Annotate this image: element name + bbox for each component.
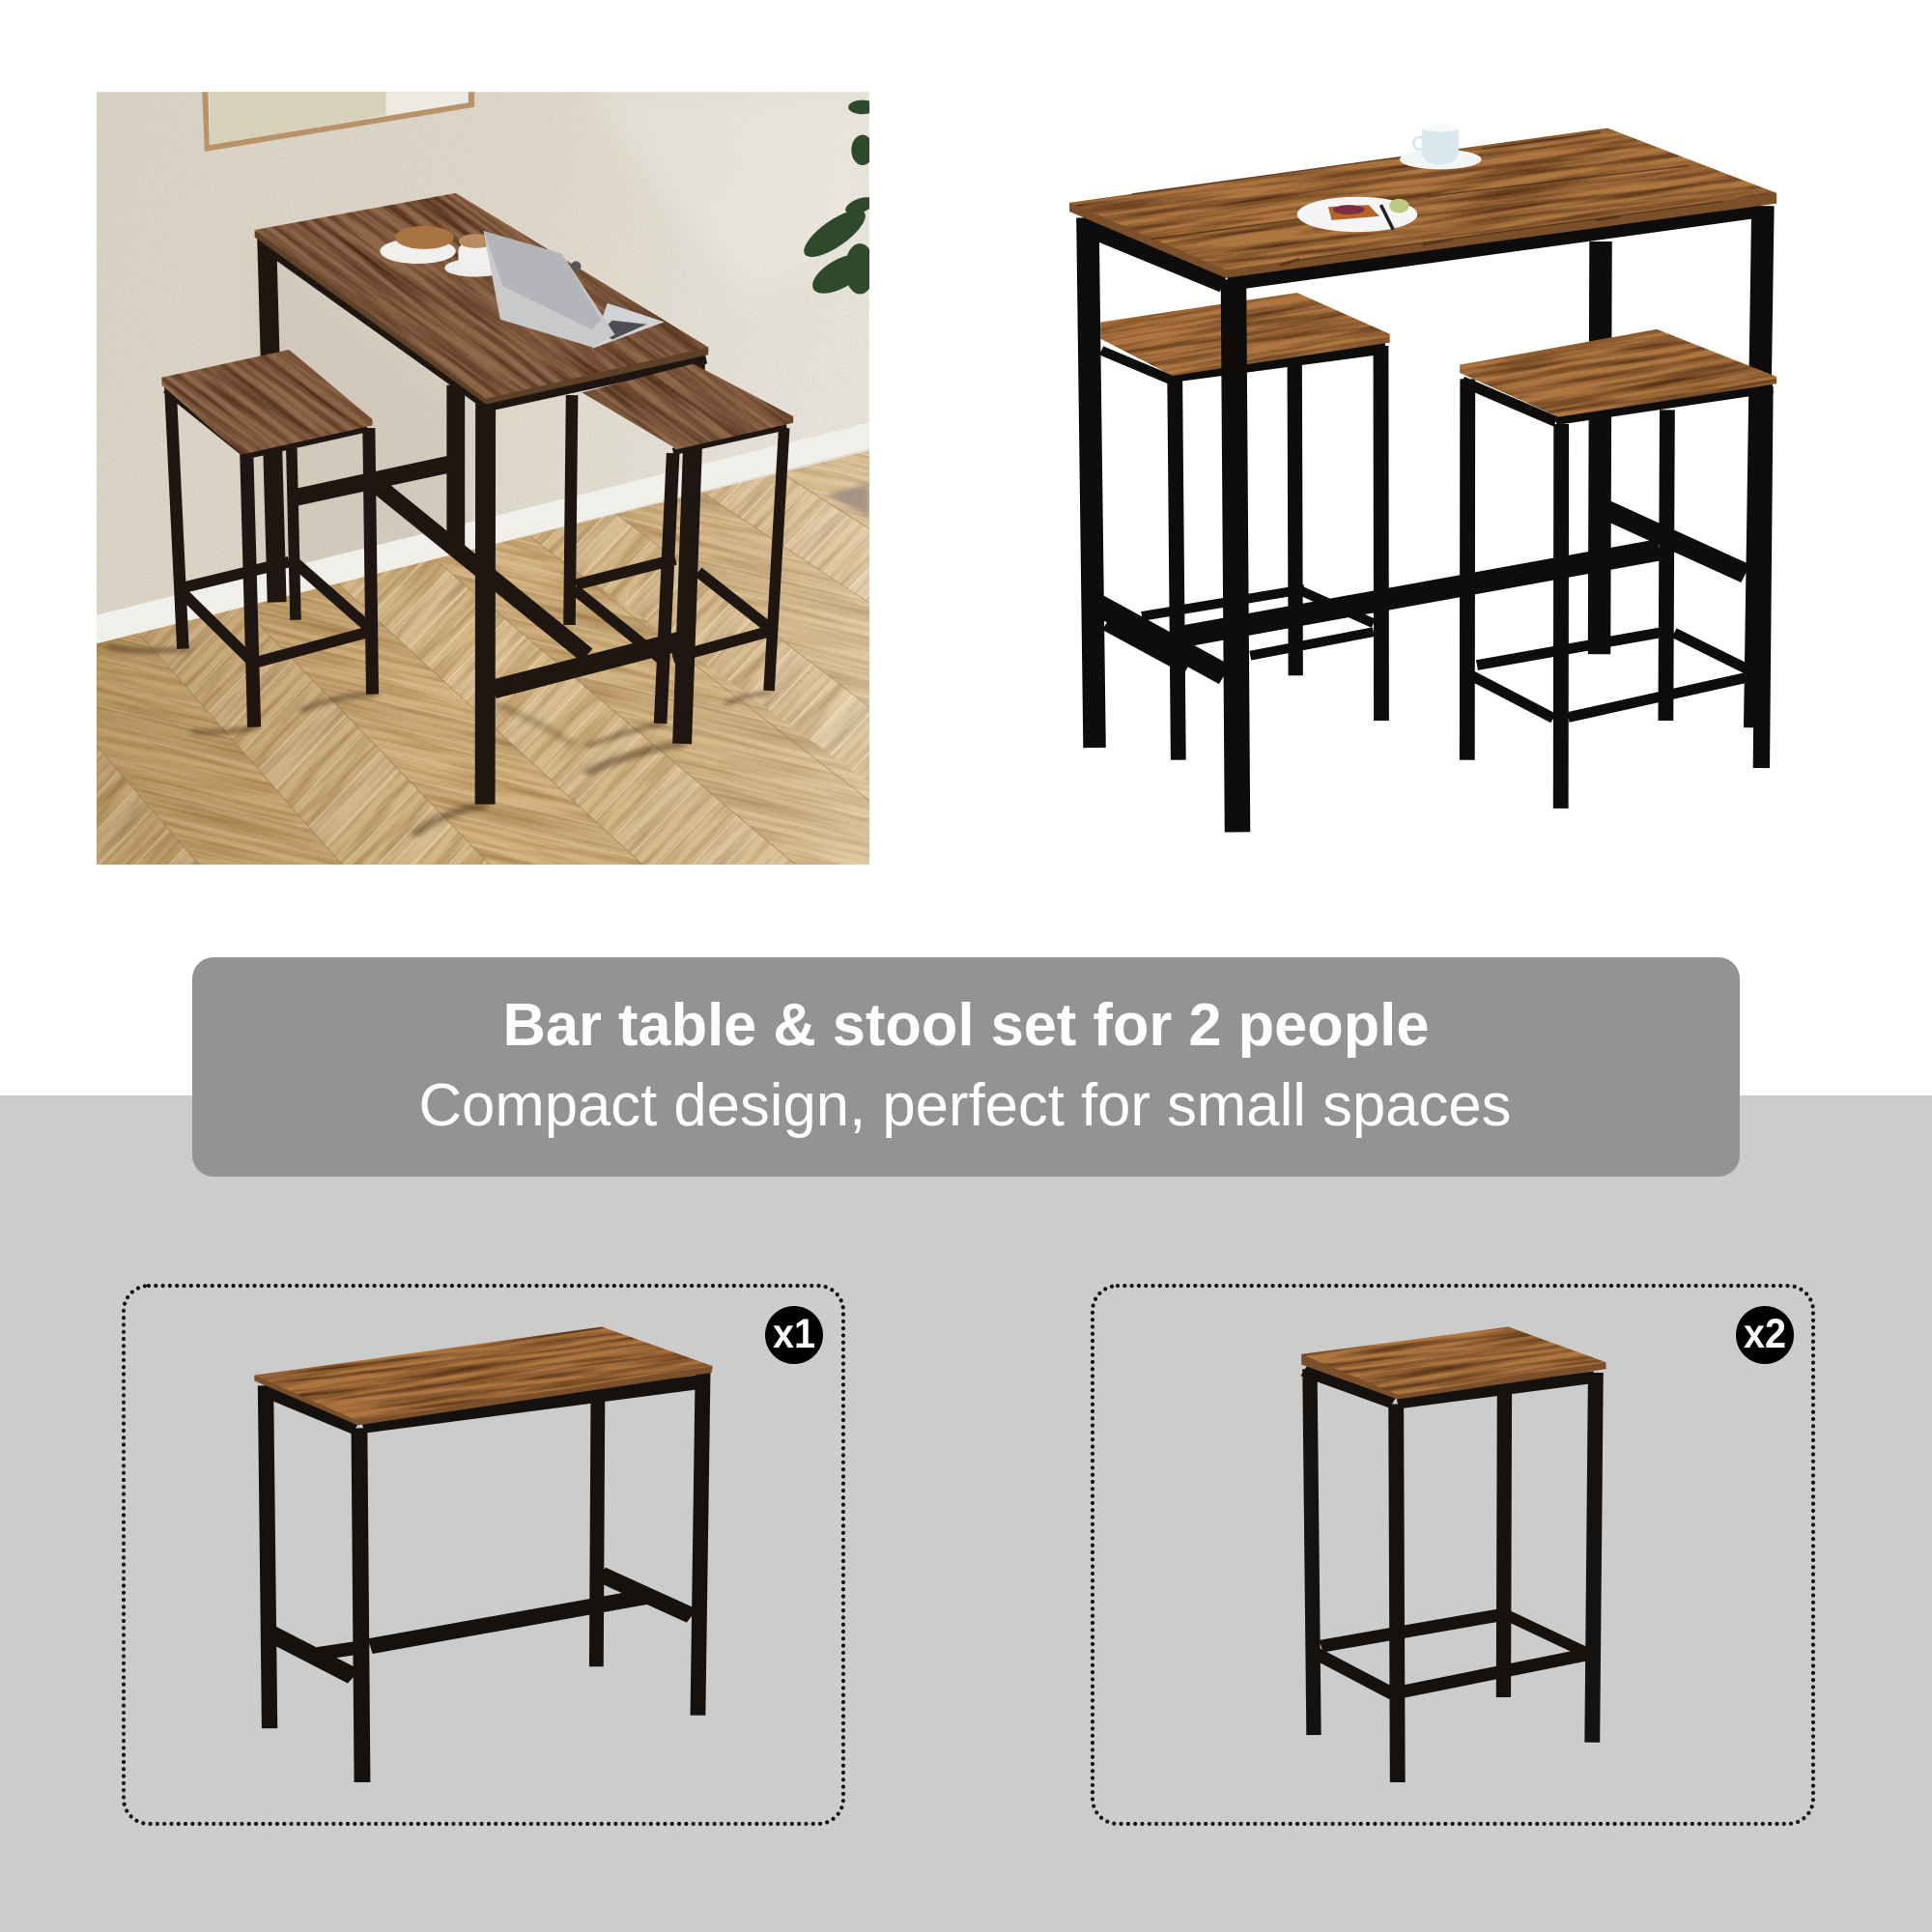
panel: table x1 [124, 1286, 843, 1824]
banner subheading: Compact design, perfect for small spaces [419, 1072, 1511, 1139]
front-right stool [1460, 329, 1776, 809]
stool illustration [1301, 1327, 1606, 1782]
dotted frame [124, 1286, 843, 1824]
table rear legs and foot bars [1088, 206, 1763, 748]
badge x1: x1 [773, 1311, 815, 1357]
badge x2 [1736, 1306, 1794, 1364]
table top and front frame [1069, 128, 1776, 832]
badge x1 [765, 1306, 823, 1364]
left stool [161, 350, 372, 727]
cup and saucer [1400, 125, 1482, 169]
banner background [192, 957, 1740, 1177]
right stool [569, 364, 793, 724]
banner heading: Bar table & stool set for 2 people [502, 992, 1430, 1059]
panel: stool x2 [1093, 1286, 1813, 1824]
herringbone floor [97, 450, 869, 865]
baseboard [97, 423, 869, 645]
furniture in the photo [161, 193, 793, 805]
back-left stool [1100, 293, 1390, 760]
dotted frame [1093, 1286, 1813, 1824]
croissant plate and coffee [380, 226, 505, 277]
badge x2: x2 [1744, 1311, 1786, 1357]
framed wall art [202, 92, 474, 152]
lower grey section [0, 1095, 1932, 1932]
rug corner [826, 483, 869, 517]
plate with toast [1297, 197, 1417, 232]
tablet and keyboard [484, 231, 665, 349]
leg shadows [111, 647, 767, 834]
table legs and frame [264, 239, 706, 805]
panel: room lifestyle photo [97, 92, 869, 865]
floor seams [97, 476, 869, 866]
panel: product set on white [1069, 125, 1776, 832]
table illustration [254, 1327, 713, 1782]
wall [97, 92, 876, 648]
wood plank seams and cracks [1132, 132, 1723, 266]
banner [192, 957, 1740, 1177]
plant leaves [804, 100, 869, 294]
table top [255, 193, 708, 404]
